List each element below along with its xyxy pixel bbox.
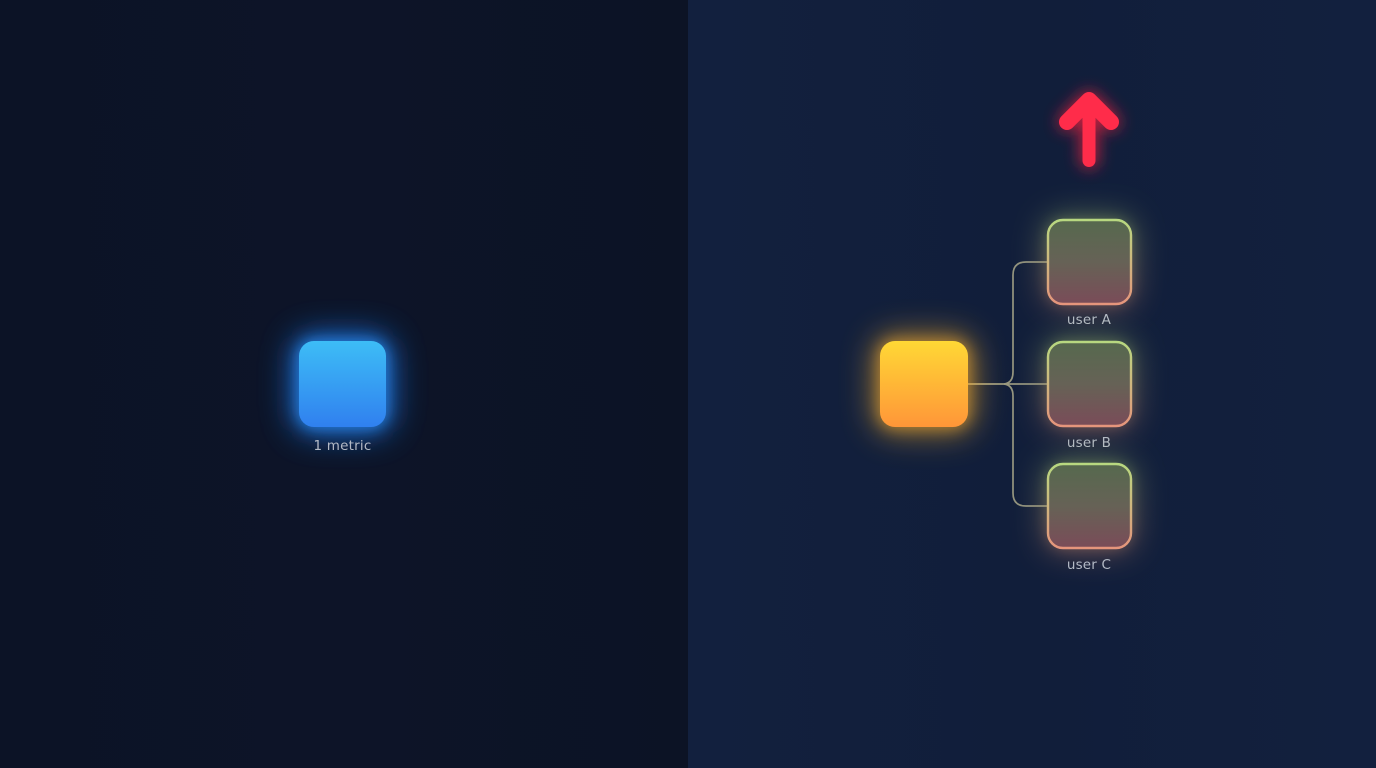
label: 1 metric: 1 metric <box>314 438 371 454</box>
card: user A <box>1044 216 1135 328</box>
card: user B <box>1044 338 1135 451</box>
label: user B: user B <box>1067 435 1111 451</box>
label: user A: user A <box>1067 312 1112 328</box>
connector lines <box>968 262 1047 506</box>
panel: per-user metrics <box>873 100 1135 573</box>
panel: single metric <box>292 334 393 454</box>
panel: right background <box>688 0 1376 768</box>
card: user C <box>1044 460 1135 573</box>
label: user C: user C <box>1067 557 1111 573</box>
panel: left background <box>0 0 688 768</box>
icon: blue metric square <box>292 334 393 434</box>
icon: yellow metric square <box>873 334 975 434</box>
icon: red up arrow <box>1067 100 1111 160</box>
